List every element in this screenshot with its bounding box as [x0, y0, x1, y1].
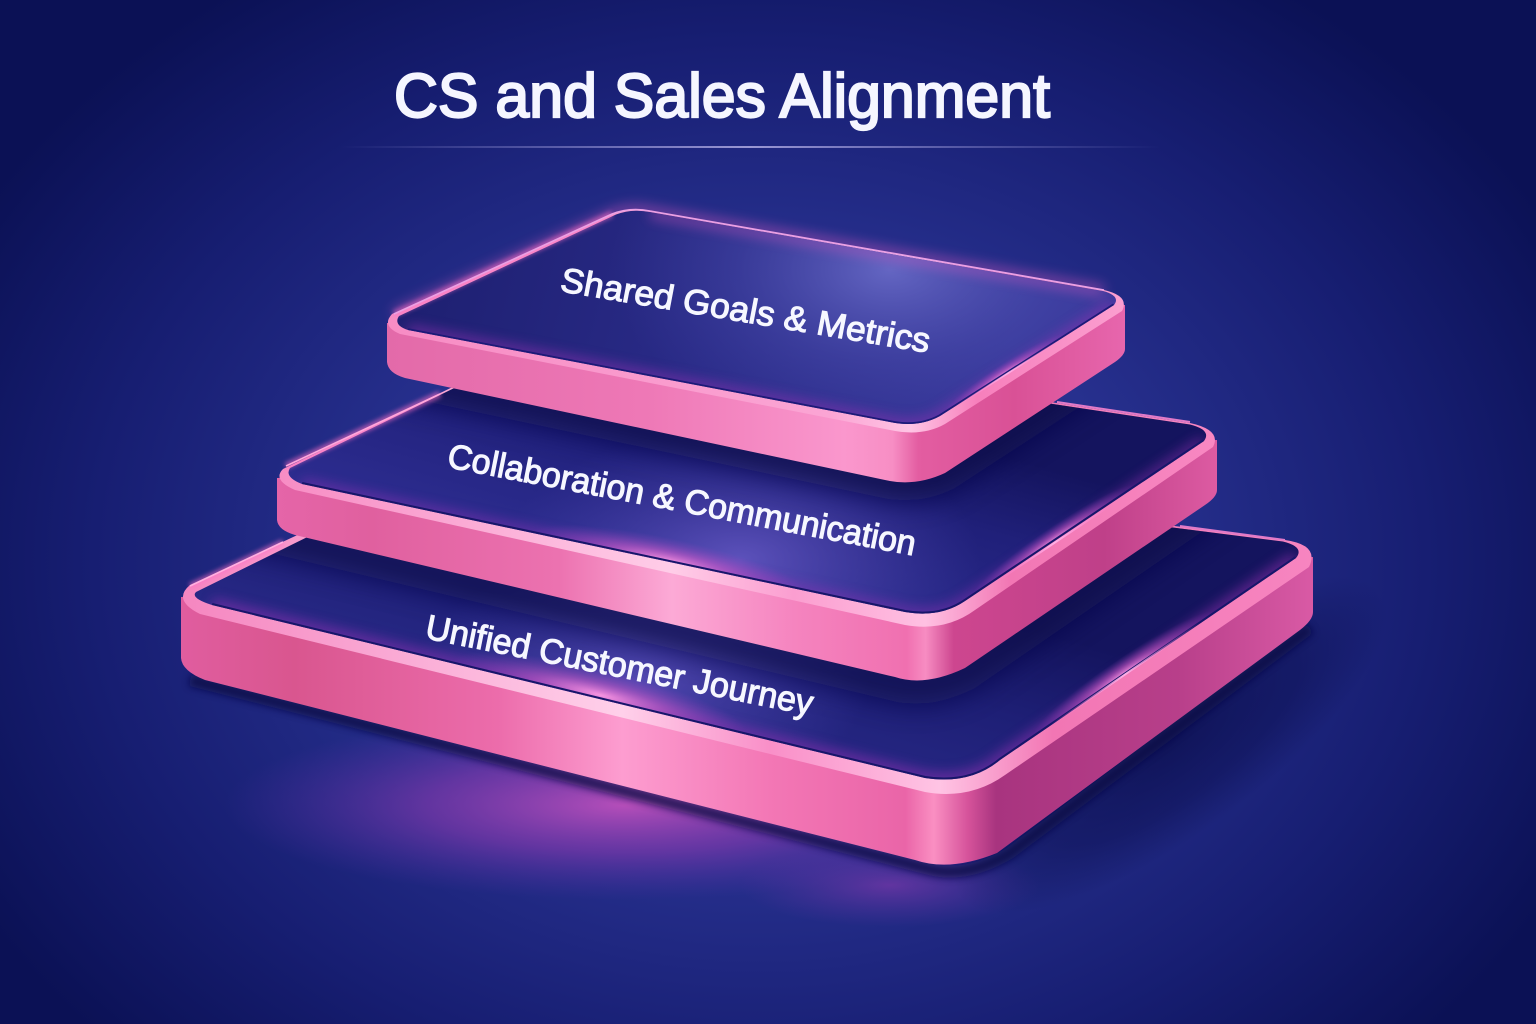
top plate glow lines: [394, 214, 612, 314]
middle plate rim: [279, 332, 1215, 627]
bottom plate surface: [195, 444, 1299, 780]
plate: Collaboration & Communication: [277, 388, 1217, 680]
bottom plate surface lighting: [207, 528, 1298, 780]
middle plate surface: [288, 334, 1206, 614]
middle plate glow lines: [286, 394, 440, 466]
bottom plate rim: [183, 442, 1312, 794]
floor glow: [225, 710, 1025, 900]
bottom plate glow lines: [190, 542, 283, 586]
top plate side: [387, 305, 1125, 482]
floor shadow: [190, 628, 1310, 872]
title divider: [340, 146, 1160, 148]
top plate rim: [388, 210, 1124, 432]
middle plate side: [277, 440, 1217, 680]
title: CS and Sales Alignment: [394, 62, 1050, 131]
middle plate surface lighting: [298, 388, 1206, 614]
top plate surface: [397, 211, 1116, 424]
label: Shared Goals & Metrics: Shared Goals & Metrics: [557, 261, 933, 361]
right floor shadow: [907, 519, 1433, 971]
floor glow right: [740, 843, 1040, 927]
top plate halo: [394, 210, 1104, 314]
bottom plate side: [181, 557, 1313, 865]
top plate surface lighting: [404, 212, 1116, 424]
label: Collaboration & Communication: Collaboration & Communication: [444, 437, 919, 563]
plate: Unified Customer Journey: [181, 525, 1313, 865]
plate: Shared Goals & Metrics: [387, 180, 1160, 482]
label: Unified Customer Journey: Unified Customer Journey: [422, 608, 817, 723]
